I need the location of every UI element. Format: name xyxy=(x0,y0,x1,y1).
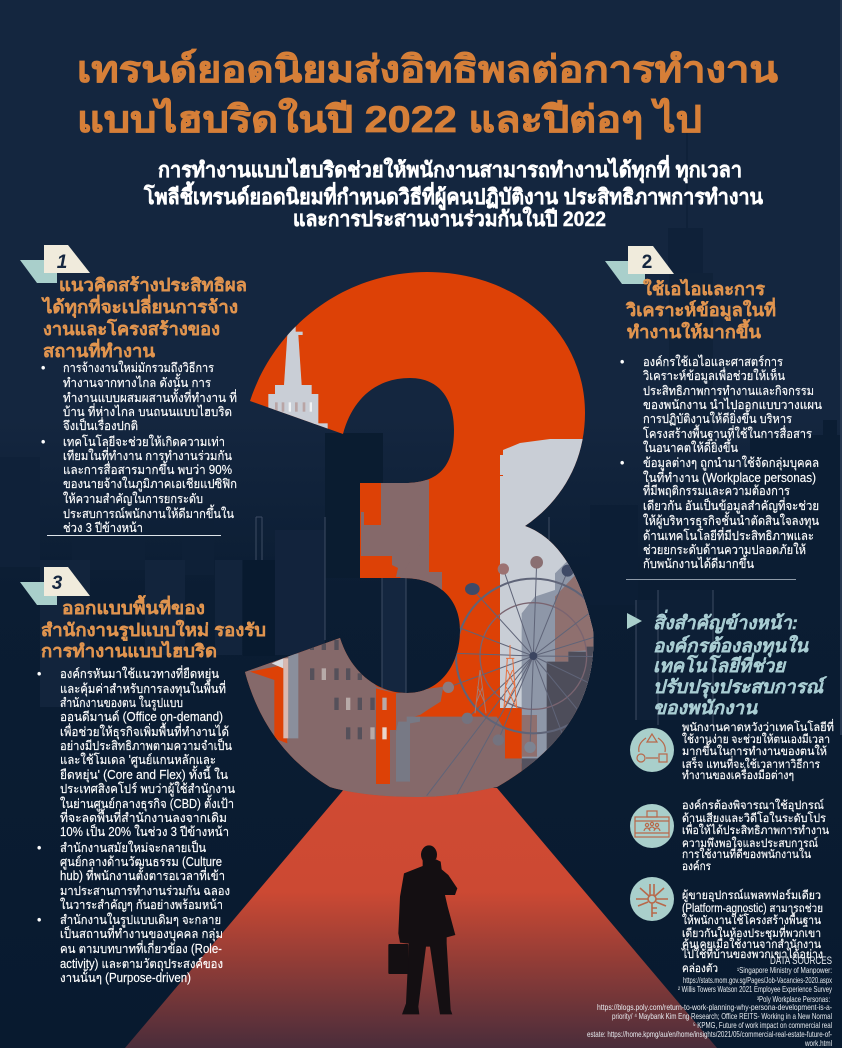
badge 1: 1 xyxy=(57,252,67,273)
heading 1: สถานที่ทำงาน xyxy=(43,338,155,361)
text block 3: สำนักงานสมัยใหม่จะกลายเป็น xyxy=(60,840,206,855)
text block 3: ศูนย์กลางด้านวัฒนธรรม (Culture xyxy=(60,855,222,870)
text block 2: ที่มีพฤติกรรมและความต้องการ xyxy=(643,482,790,498)
icon: video meeting screen xyxy=(630,804,674,848)
text block 2: องค์กรใช้เอไอและศาสตร์การ xyxy=(643,355,783,369)
callout heading: สิ่งสำคัญข้างหน้า: xyxy=(653,609,798,634)
text block 1 xyxy=(41,361,237,535)
text: item 1 xyxy=(682,719,834,782)
text block 3: 10% เป็น 20% ในช่วง 3 ปีข้างหน้า xyxy=(60,824,229,839)
text block 3: activity) และตามวัตถุประสงค์ของ xyxy=(60,957,223,972)
text: item 3 xyxy=(681,888,823,975)
text block 3: • xyxy=(37,913,41,927)
ferris wheel xyxy=(426,568,594,796)
text: item 3: ไปใช้ที่บ้านของพวกเขาได้อย่าง xyxy=(681,946,823,961)
text: item 1: มากขึ้นในการทำงานของตนให้ xyxy=(682,743,827,758)
red floor spotlight xyxy=(125,788,717,1048)
badge 2 xyxy=(605,246,674,284)
badge 3 xyxy=(20,567,90,605)
text block 2: ให้ผู้บริหารธุรกิจชั้นนำตัดสินใจลงทุน xyxy=(643,511,819,529)
text block 3: ออนดีมานด์ (Office on-demand) xyxy=(60,710,223,724)
windows xyxy=(310,640,375,739)
arrow: callout marker xyxy=(627,613,642,629)
heading 3: สำนักงานรูปแบบใหม่ รองรับ xyxy=(41,619,266,642)
text: item 1: พนักงานคาดหวังว่าเทคโนโลยีที่ xyxy=(682,719,834,734)
heading 3: การทำงานแบบไฮบริด xyxy=(41,640,217,661)
text block 3: ประเทศสิงคโปร์ พบว่าผู้ใช้สำนักงาน xyxy=(60,781,235,797)
text: item 3: เดียวกันในห้องประชุมที่พวกเขา xyxy=(682,925,821,940)
badge 2: 2 xyxy=(642,252,652,273)
text block 1: บ้าน ที่ห่างไกล บนถนนแบบไฮบริด xyxy=(63,403,232,419)
text block 3: และคุ้มค่าสำหรับการลงทุนในพื้นที่ xyxy=(60,679,226,697)
text: item 2: องค์กรต้องพิจารณาใช้อุปกรณ์ xyxy=(682,798,824,812)
big number 3 illustration xyxy=(245,272,594,797)
text block 2 xyxy=(620,355,822,571)
text block 1: เทียมในที่ทำงาน การทำงานร่วมกัน xyxy=(63,447,232,463)
text: item 1: ทำงานของเครื่องมือต่างๆ xyxy=(682,767,794,782)
callout heading: ของพนักงาน xyxy=(653,697,758,718)
text: item 2 xyxy=(682,798,829,873)
text block 2: การปฏิบัติงานให้ดียิ่งขึ้น บริหาร xyxy=(643,409,792,426)
text block 2: ของพนักงาน นำไปออกแบบวางแผน xyxy=(643,398,822,412)
heading 2 xyxy=(625,278,776,342)
badge 1 xyxy=(20,245,90,283)
text block 1: จึงเป็นเรื่องปกติ xyxy=(63,417,138,433)
text block 2: กับพนักงานได้ดีมากขึ้น xyxy=(643,554,754,571)
title: แบบไฮบริดในปี 2022 และปีต่อๆ ไป xyxy=(77,97,702,140)
text block 2: • xyxy=(620,355,624,369)
text block 2: ข้อมูลต่างๆ ถูกนำมาใช้จัดกลุ่มบุคคล xyxy=(643,456,819,471)
heading 3 xyxy=(41,595,266,661)
text block 1: ช่วง 3 ปีข้างหน้า xyxy=(63,521,143,535)
text: item 3: ให้พนักงานใช้โครงสร้างพื้นฐาน xyxy=(682,912,821,927)
callout heading xyxy=(653,609,828,718)
heading 1: ได้ทุกที่จะเปลี่ยนการจ้าง xyxy=(41,294,238,318)
text block 2: ประสิทธิภาพการทำงานและกิจกรรม xyxy=(643,384,814,398)
text block 1: ทำงานจากทางไกล ดังนั้น การ xyxy=(63,373,211,390)
text block 3: hub) ที่พนักงานตั้งตารอเวลาที่เข้า xyxy=(60,866,225,883)
text block 2: เดียวกัน อันเป็นข้อมูลสำคัญที่จะช่วย xyxy=(643,497,819,514)
text block 2: ในอนาคตให้ดียิ่งขึ้น xyxy=(643,438,738,455)
title xyxy=(77,49,778,140)
text: item 2: ความพึงพอใจและประสบการณ์ xyxy=(682,836,818,850)
text block 3: ในย่านศูนย์กลางธุรกิจ (CBD) ตั้งเป้า xyxy=(60,794,234,812)
text block 1: • xyxy=(41,361,45,375)
data sources xyxy=(587,955,833,1048)
lattice towers xyxy=(504,645,517,708)
text block 2: โครงสร้างพื้นฐานที่ใช้ในการสื่อสาร xyxy=(643,424,812,441)
lower city block xyxy=(245,556,594,797)
text block 1: ของนายจ้างในภูมิภาคเอเชียแปซิฟิก xyxy=(63,477,237,492)
text block 3: เป็นสถานที่ทำงานของบุคคล กลุ่ม xyxy=(60,925,223,942)
text: item 3: ผู้ขายอุปกรณ์แพลทฟอร์มเดียว xyxy=(682,888,821,902)
text block 1: เทคโนโลยีจะช่วยให้เกิดความเท่า xyxy=(63,434,225,449)
icon: circuit key xyxy=(630,877,674,921)
text block 1: ให้ความสำคัญในการยกระดับ xyxy=(63,492,203,506)
text block 3: มาประสานการทำงานร่วมกัน ฉลอง xyxy=(60,884,230,898)
text block 1: และการสื่อสารมากขึ้น พบว่า 90% xyxy=(63,460,232,477)
text block 3: ที่จะลดพื้นที่สำนักงานลงจากเดิม xyxy=(60,808,227,825)
heading 1: แนวคิดสร้างประสิทธิผล xyxy=(59,275,247,295)
right buildings xyxy=(522,560,597,763)
text block 3: อย่างมีประสิทธิภาพตามความจำเป็น xyxy=(60,738,232,753)
text block 2: ช่วยยกระดับด้านความปลอดภัยให้ xyxy=(643,543,806,557)
heading 3: ออกแบบพื้นที่ของ xyxy=(62,595,205,618)
text: item 3: (Platform-agnostic) สามารถช่วย xyxy=(682,903,823,915)
text block 3: สำนักงานของตน ในรูปแบบ xyxy=(60,696,183,711)
text block 2: ด้านเทคโนโลยีที่มีประสิทธิภาพและ xyxy=(643,527,814,543)
text: item 2: องค์กร xyxy=(682,859,711,873)
heading 2: ทำงานให้มากขึ้น xyxy=(627,319,761,342)
text block 3: เพื่อช่วยให้ธุรกิจเพิ่มพื้นที่ทำงานได้ xyxy=(60,722,229,740)
text block 3: และใช้โมเดล 'ศูนย์แกนหลักและ xyxy=(60,752,216,768)
tower at upper left xyxy=(268,322,328,433)
text block 3: คน ตามบทบาทที่เกี่ยวข้อง (Role- xyxy=(60,940,222,956)
heading 2: ใช้เอไอและการ xyxy=(643,278,766,299)
central brown block xyxy=(361,480,442,590)
text block 3 xyxy=(37,665,235,985)
text: item 3: คุ้นเคยเมื่อใช้งานจากสำนักงาน xyxy=(682,936,821,951)
text block 3: • xyxy=(37,667,41,681)
subtitle xyxy=(143,154,764,231)
person silhouette with briefcase xyxy=(388,845,457,1014)
text block 2: วิเคราะห์ข้อมูลเพื่อช่วยให้เห็น xyxy=(643,367,785,384)
text block 3: สำนักงานในรูปแบบเดิมๆ จะกลาย xyxy=(60,913,221,928)
callout heading: เทคโนโลยีที่ช่วย xyxy=(653,652,787,676)
text: item 1: เสร็จ แทนที่จะใช้เวลาหาวิธีการ xyxy=(682,756,820,771)
text block 2: ในที่ทำงาน (Workplace personas) xyxy=(643,469,816,485)
heading 1 xyxy=(41,275,247,361)
text: item 2: เพื่อให้ได้ประสิทธิภาพการทำงาน xyxy=(682,822,829,837)
data sources: work.html xyxy=(804,1039,832,1048)
text block 3: องค์กรหันมาใช้แนวทางที่ยืดหยุ่น xyxy=(60,665,219,682)
text block 1: • xyxy=(41,435,45,449)
text block 3: งานนั้นๆ (Purpose-driven) xyxy=(60,968,191,985)
text block 3: ยืดหยุ่น' (Core and Flex) ทั้งนี้ ใน xyxy=(60,765,228,783)
title: เทรนด์ยอดนิยมส่งอิทธิพลต่อการทำงาน xyxy=(77,49,778,90)
text block 1: ประสบการณ์พนักงานให้ดีมากขึ้นใน xyxy=(63,504,234,521)
subtitle: การทำงานแบบไฮบริดช่วยให้พนักงานสามารถทำงานได้ทุกที่ ทุกเวลา xyxy=(158,154,742,184)
icon: shapes cycle xyxy=(630,728,674,772)
subtitle: และการประสานงานร่วมกันในปี 2022 xyxy=(293,206,606,231)
text block 3: • xyxy=(37,841,41,855)
text block 1: ทำงานแบบผสมผสานทั้งที่ทำงาน ที่ xyxy=(63,388,237,405)
text block 1: การจ้างงานใหม่มักรวมถึงวิธีการ xyxy=(63,361,214,375)
text block 2: • xyxy=(620,456,624,470)
heading 2: วิเคราะห์ข้อมูลในที่ xyxy=(625,297,776,322)
callout heading: ปรับปรุงประสบการณ์ xyxy=(653,676,828,699)
text: item 2: ด้านเสียงและวิดีโอในระดับโปร xyxy=(682,811,826,825)
text: item 2: การใช้งานที่ดีของพนักงานใน xyxy=(682,846,811,861)
subtitle: โพลีชี้เทรนด์ยอดนิยมที่กำหนดวิธีที่ผู้คนปฏิบัติงาน ประสิทธิภาพการทำงาน xyxy=(143,181,764,211)
text block 3: ในวาระสำคัญๆ กันอย่างพร้อมหน้า xyxy=(60,898,223,912)
callout heading: องค์กรต้องลงทุนใน xyxy=(653,635,809,658)
text: item 3: คล่องตัว xyxy=(682,963,718,975)
badge 3: 3 xyxy=(52,573,63,594)
right pale building xyxy=(500,439,600,708)
heading 1: งานและโครงสร้างของ xyxy=(43,318,220,339)
